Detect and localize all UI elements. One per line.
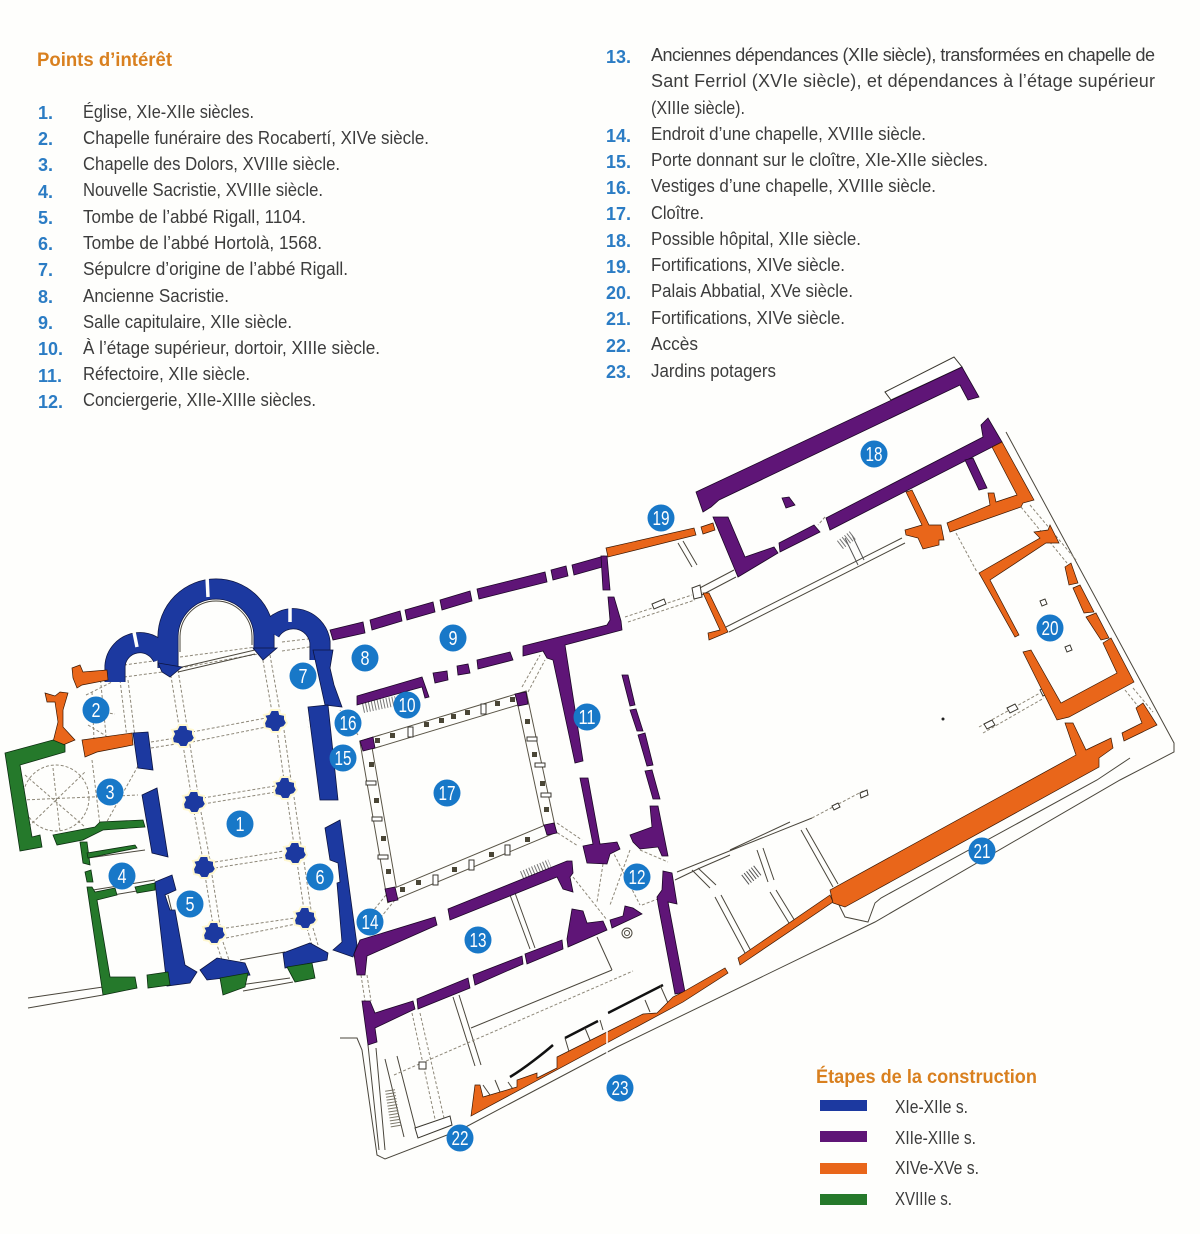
apse fills bbox=[115, 589, 320, 682]
list: points 1 to 12: Nouvelle Sacristie, XVIIIe siècle. bbox=[83, 180, 323, 200]
cloister arcade bbox=[363, 697, 551, 895]
interior walls south wing bbox=[368, 893, 612, 1150]
numbered markers: 20 bbox=[1042, 618, 1058, 640]
list: points 13 to 23: Endroit d’une chapelle, XVIIIe siècle. bbox=[651, 124, 926, 144]
list: points 13 to 23: 13. bbox=[606, 47, 631, 67]
numbered markers: 22 bbox=[452, 1128, 468, 1150]
list: points 13 to 23: 23. bbox=[606, 362, 631, 382]
walls: XIVe-XVe orange bbox=[45, 442, 1157, 1116]
legend: étapes de la construction: XVIIIe s. bbox=[895, 1189, 952, 1209]
list: points 1 to 12: 4. bbox=[38, 182, 53, 202]
numbered markers: 1 bbox=[236, 814, 244, 836]
list: points 13 to 23: 22. bbox=[606, 336, 631, 356]
list: points 13 to 23: Fortifications, XIVe siècle. bbox=[651, 308, 845, 328]
numbered markers bbox=[82, 440, 1064, 1152]
list: points 13 to 23: Possible hôpital, XIIe siècle. bbox=[651, 229, 861, 249]
numbered markers: 17 bbox=[438, 783, 456, 805]
legend: étapes de la construction: XIe-XIIe s. bbox=[895, 1097, 968, 1117]
numbered markers: 13 bbox=[470, 930, 486, 952]
walls: XIIe-XIIIe purple bbox=[330, 367, 1002, 1045]
title: points d'intérêt: Points d’intérêt bbox=[37, 50, 173, 71]
list: points 13 to 23: 16. bbox=[606, 178, 631, 198]
numbered markers: 19 bbox=[652, 508, 670, 530]
numbered markers: 15 bbox=[334, 748, 352, 770]
list: points 1 to 12: 10. bbox=[38, 339, 63, 359]
numbered markers: 2 bbox=[92, 700, 100, 722]
list: points 1 to 12: 7. bbox=[38, 260, 53, 280]
numbered markers: 11 bbox=[578, 707, 596, 729]
numbered markers: 14 bbox=[362, 912, 378, 934]
walls: XVIIIe green bbox=[5, 740, 315, 995]
list: points 13 to 23: Fortifications, XIVe siècle. bbox=[651, 255, 845, 275]
list: points 13 to 23: 18. bbox=[606, 231, 631, 251]
list: points 13 to 23: 20. bbox=[606, 283, 631, 303]
legend: étapes de la construction: XIVe-XVe s. bbox=[895, 1158, 979, 1178]
list: points 1 to 12: Chapelle des Dolors, XVIIIe siècle. bbox=[83, 154, 340, 174]
list: points 1 to 12: Tombe de l’abbé Rigall, 1104. bbox=[83, 207, 306, 227]
legend: étapes de la construction bbox=[816, 1066, 1037, 1209]
fold line bbox=[606, 1005, 608, 1055]
list: points 1 to 12: Salle capitulaire, XIIe siècle. bbox=[83, 312, 292, 332]
list: points 13 to 23: 17. bbox=[606, 204, 631, 224]
list: points 13 to 23: (XIIIe siècle). bbox=[651, 98, 745, 118]
list: points 13 to 23: Sant Ferriol (XVIe siècle), et dépendances à l’étage supérieur bbox=[651, 71, 1155, 91]
interior north-east details bbox=[678, 538, 905, 632]
list: points 1 to 12: Ancienne Sacristie. bbox=[83, 286, 229, 306]
list: points 1 to 12: Tombe de l’abbé Hortolà, 1568. bbox=[83, 233, 322, 253]
list: points 13 to 23: 15. bbox=[606, 152, 631, 172]
legend: étapes de la construction: Étapes de la construction bbox=[816, 1066, 1037, 1088]
numbered markers: 9 bbox=[448, 628, 458, 650]
church vault lines bbox=[124, 638, 318, 960]
numbered markers: 10 bbox=[398, 695, 416, 717]
list: points 1 to 12: Église, XIe-XIIe siècles. bbox=[83, 102, 254, 122]
list: points 13 to 23 bbox=[606, 45, 1155, 382]
list: points 13 to 23: Cloître. bbox=[651, 203, 704, 223]
numbered markers: 7 bbox=[298, 666, 308, 688]
list: points 13 to 23: Palais Abbatial, XVe siècle. bbox=[651, 281, 853, 301]
list: points 1 to 12 bbox=[38, 102, 429, 412]
sacristy thin elements bbox=[88, 850, 172, 912]
list: points 1 to 12: À l’étage supérieur, dortoir, XIIIe siècle. bbox=[83, 338, 380, 358]
list: points 1 to 12: 11. bbox=[38, 366, 62, 386]
numbered markers: 21 bbox=[974, 841, 990, 863]
list: points 1 to 12: Chapelle funéraire des Rocabertí, XIVe siècle. bbox=[83, 128, 429, 148]
list: points 1 to 12: 12. bbox=[38, 392, 63, 412]
numbered markers: 4 bbox=[118, 866, 126, 888]
numbered markers: 8 bbox=[360, 648, 370, 670]
list: points 1 to 12: 6. bbox=[38, 234, 53, 254]
list: points 1 to 12: 8. bbox=[38, 287, 53, 307]
ragged garden wall bbox=[510, 985, 663, 1077]
numbered markers: 12 bbox=[628, 867, 646, 889]
list: points 13 to 23: Anciennes dépendances (XIIe siècle), transformées en chapelle de bbox=[651, 45, 1155, 65]
list: points 13 to 23: Porte donnant sur le cloître, XIe-XIIe siècles. bbox=[651, 150, 988, 170]
cloister dashes bbox=[340, 655, 582, 928]
numbered markers: 18 bbox=[866, 444, 882, 466]
list: points 13 to 23: Jardins potagers bbox=[651, 361, 776, 381]
numbered markers: 23 bbox=[612, 1078, 628, 1100]
numbered markers: 16 bbox=[340, 713, 356, 735]
numbered markers: 3 bbox=[106, 782, 114, 804]
chapel vault lines bbox=[22, 675, 138, 832]
numbered markers: 5 bbox=[186, 894, 194, 916]
list: points 1 to 12: Réfectoire, XIIe siècle. bbox=[83, 364, 250, 384]
legend: étapes de la construction: XIIe-XIIIe s. bbox=[895, 1128, 976, 1148]
list: points 1 to 12: 9. bbox=[38, 313, 53, 333]
list: points 13 to 23: 14. bbox=[606, 126, 631, 146]
floor plan: thin outlines and vault lines bbox=[22, 357, 1174, 1159]
list: points 13 to 23: 21. bbox=[606, 309, 631, 329]
list: points 1 to 12: 5. bbox=[38, 208, 53, 228]
numbered markers: 6 bbox=[316, 867, 324, 889]
list: points 13 to 23: Vestiges d’une chapelle, XVIIIe siècle. bbox=[651, 176, 936, 196]
list: points 1 to 12: 2. bbox=[38, 129, 53, 149]
list: points 1 to 12: Conciergerie, XIIe-XIIIe siècles. bbox=[83, 390, 316, 410]
list: points 13 to 23: Accès bbox=[651, 334, 698, 354]
list: points 13 to 23: 19. bbox=[606, 257, 631, 277]
list: points 1 to 12: Sépulcre d’origine de l’abbé Rigall. bbox=[83, 259, 348, 279]
walls: XIe-XIIe blue bbox=[115, 576, 357, 986]
list: points 1 to 12: 3. bbox=[38, 155, 53, 175]
interior walls south-east bbox=[675, 818, 838, 953]
apse outlines bbox=[115, 589, 320, 682]
list: points 1 to 12: 1. bbox=[38, 103, 53, 123]
